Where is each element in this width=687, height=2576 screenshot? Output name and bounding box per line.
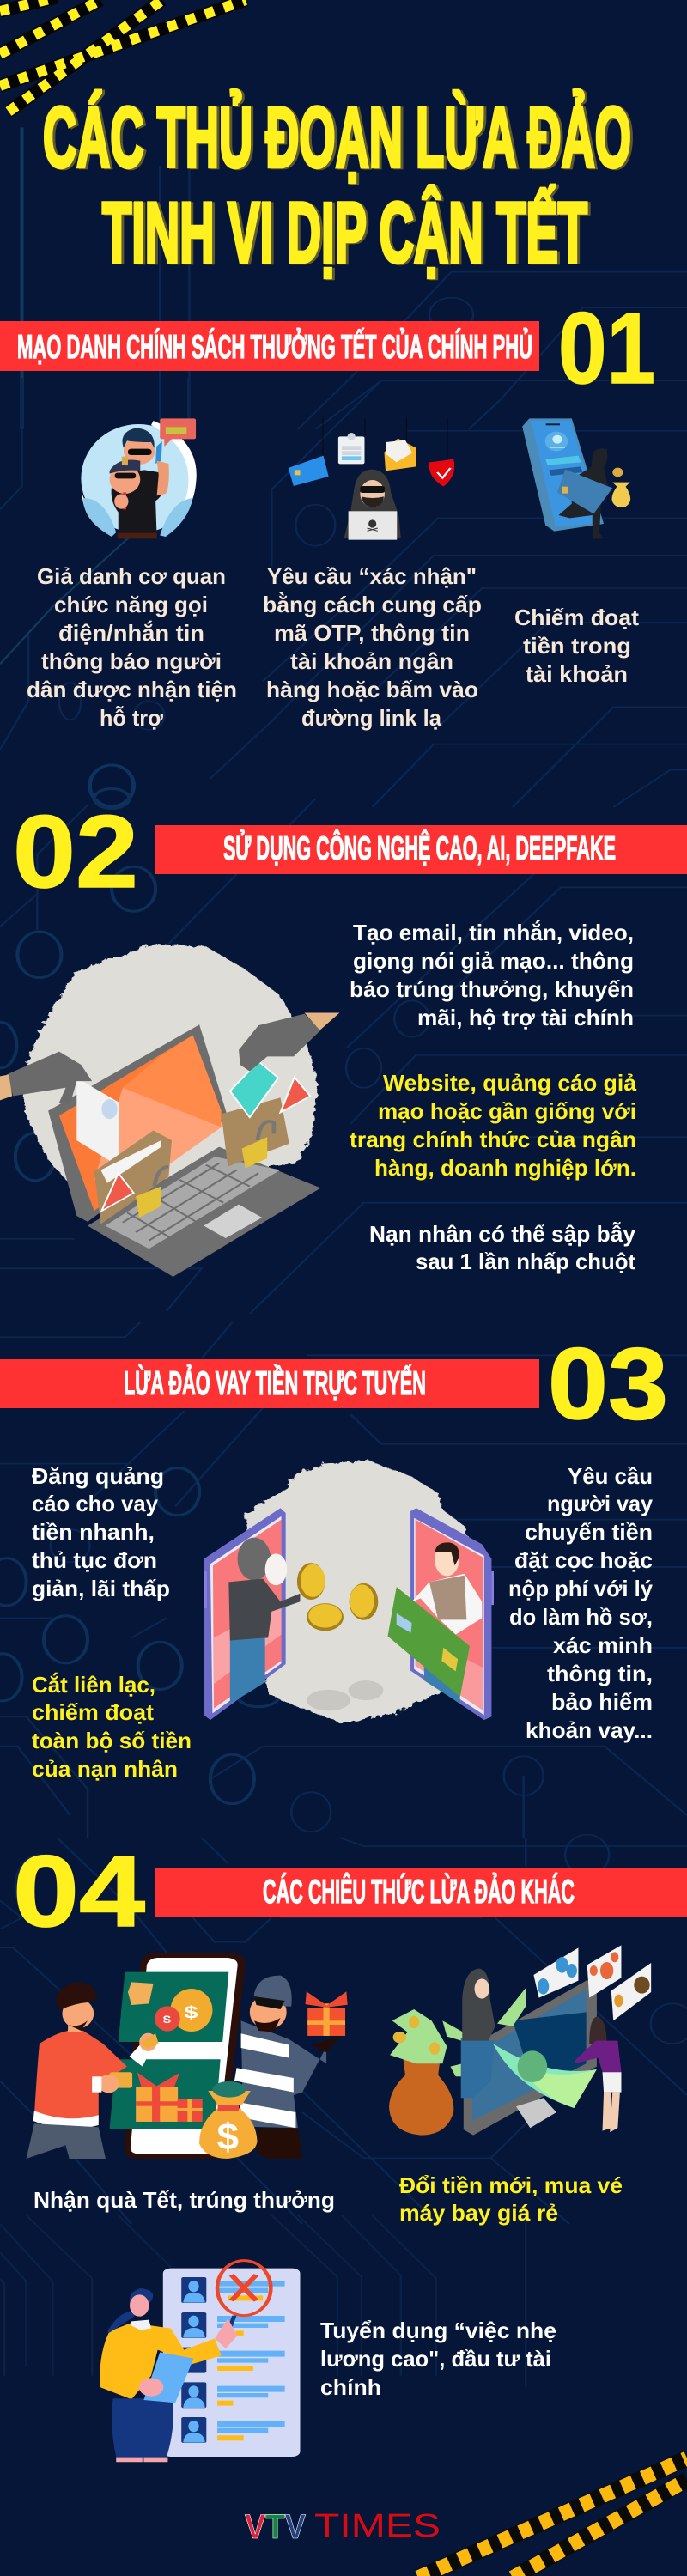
text: recruitment and investment: lương cao", đầu tư tài	[320, 2346, 551, 2372]
text: deposit request: người vay	[547, 1491, 654, 1516]
text: quick loan ads: giản, lãi thấp	[32, 1576, 170, 1601]
VTV Times logo: TIMES	[314, 2508, 441, 2544]
text: fake websites: trang chính thức của ngân	[350, 1127, 636, 1152]
text: cut contact	[32, 1672, 192, 1782]
text: quick loan ads: tiền nhanh,	[32, 1519, 155, 1545]
section 01 header bar	[0, 321, 539, 371]
icon: impostor officer with phone	[81, 418, 197, 538]
section 02 header bar	[155, 825, 687, 874]
VTV Times logo	[245, 2508, 441, 2546]
section 04 number: 04	[13, 1835, 145, 1948]
section 04	[13, 1835, 687, 2462]
text: impersonating officials: Giả danh cơ quan	[37, 563, 226, 589]
text: deposit request: đặt cọc hoặc	[514, 1547, 653, 1573]
text: appropriate money	[514, 605, 639, 687]
text: fake email and messages	[350, 920, 634, 1030]
text: recruitment and investment: Tuyển dụng “việc nhẹ	[320, 2318, 556, 2343]
text: impersonating officials: chức năng gọi	[54, 592, 208, 617]
text: fake websites: mạo hoặc gần giống với	[378, 1098, 636, 1124]
text: request for confirmation: hàng hoặc bấm vào	[266, 677, 478, 702]
illustration: money exchange and cheap air tickets	[389, 1945, 651, 2136]
text: deposit request: bảo hiểm	[551, 1689, 653, 1715]
caution tape: bottom right	[418, 2458, 687, 2576]
text: deposit request: xác minh	[553, 1632, 653, 1658]
text: request for confirmation: tài khoản ngân	[290, 648, 453, 674]
text: money exchange: Đổi tiền mới, mua vé	[399, 2172, 623, 2198]
illustration: hacked laptop on torn paper	[0, 945, 339, 1277]
text: fake websites: Website, quảng cáo giả	[383, 1070, 637, 1096]
section 03	[0, 1327, 668, 1782]
text: request for confirmation: mã OTP, thông tin	[274, 620, 470, 646]
text: appropriate money: tài khoản	[526, 661, 628, 687]
section 02 number: 02	[13, 794, 138, 909]
text: cut contact: Cắt liên lạc,	[32, 1672, 155, 1698]
section 03 heading: LỪA ĐẢO VAY TIỀN TRỰC TUYẾN	[124, 1364, 426, 1402]
text: request for confirmation: bằng cách cung cấp	[263, 592, 482, 617]
text: request for confirmation: Yêu cầu “xác nhận"	[267, 563, 477, 589]
text: one click trap	[369, 1221, 636, 1274]
text: quick loan ads: Đăng quảng	[32, 1463, 164, 1489]
section 03 header bar	[0, 1359, 539, 1408]
illustration: fake Tet gifts and prizes: $	[163, 2014, 171, 2026]
text: cut contact: chiếm đoạt	[32, 1699, 154, 1725]
text: one click trap: Nạn nhân có thể sập bẫy	[369, 1221, 636, 1247]
text: request for confirmation	[263, 563, 482, 731]
section 02	[0, 794, 687, 1277]
text: fake email and messages: giọng nói giả mạo... thông	[353, 948, 634, 974]
caution tape: top left	[0, 0, 246, 112]
text: impersonating officials: hỗ trợ	[100, 705, 163, 731]
text: recruitment and investment	[320, 2318, 556, 2400]
text: quick loan ads: thủ tục đơn	[32, 1547, 157, 1573]
text: money exchange	[399, 2172, 623, 2226]
text: deposit request: nộp phí với lý	[508, 1576, 654, 1601]
text: deposit request: do làm hồ sơ,	[509, 1604, 653, 1630]
section 01 number: 01	[558, 292, 655, 405]
section 03 number: 03	[548, 1327, 668, 1441]
text: impersonating officials: điện/nhắn tin	[58, 620, 204, 646]
text: one click trap: sau 1 lần nhấp chuột	[416, 1249, 635, 1274]
text: deposit request: Yêu cầu	[568, 1463, 653, 1489]
illustration: online loan scam between two phones	[204, 1461, 494, 1723]
text: impersonating officials: dân được nhận tiện	[27, 677, 237, 702]
text: deposit request	[508, 1463, 654, 1743]
text: fake email and messages: báo trúng thưởng, khuyến	[350, 976, 634, 1002]
text: money exchange: máy bay giá rẻ	[399, 2200, 558, 2226]
text: quick loan ads: cáo cho vay	[32, 1491, 159, 1516]
section 01	[0, 292, 655, 731]
text: deposit request: khoản vay...	[526, 1717, 653, 1743]
text: fake websites: hàng, doanh nghiệp lớn.	[374, 1155, 636, 1181]
illustration: fake job recruitment board	[100, 2261, 300, 2462]
text: fake email and messages: mãi, hộ trợ tài chính	[417, 1005, 634, 1030]
text: recruitment and investment: chính	[320, 2374, 381, 2400]
text: request for confirmation: đường link lạ	[301, 705, 442, 731]
text: appropriate money: tiền trong	[523, 633, 631, 659]
text: deposit request: thông tin,	[547, 1661, 653, 1686]
VTV Times logo: VTV	[245, 2508, 306, 2546]
icon: hacker stealing OTP and card data	[289, 418, 454, 540]
text: fake email and messages: Tạo email, tin nhắn, video,	[353, 920, 634, 945]
text: cut contact: của nạn nhân	[32, 1756, 178, 1782]
text: impersonating officials	[27, 563, 237, 731]
illustration: fake Tet gifts and prizes: $	[184, 2004, 198, 2022]
text: deposit request: chuyển tiền	[525, 1519, 653, 1545]
title	[43, 89, 631, 280]
text: appropriate money: Chiếm đoạt	[514, 605, 639, 630]
text: fake websites	[350, 1070, 637, 1181]
text: Tet gifts: Nhận quà Tết, trúng thưởng	[33, 2187, 335, 2213]
illustration: fake Tet gifts and prizes: $	[217, 2116, 239, 2158]
text: impersonating officials: thông báo người	[41, 648, 222, 674]
section 04 header bar	[155, 1868, 687, 1917]
icon: thief stealing from smartphone	[522, 418, 630, 538]
illustration: fake Tet gifts and prizes	[27, 1953, 346, 2159]
text: quick loan ads	[32, 1463, 170, 1601]
text: cut contact: toàn bộ số tiền	[32, 1728, 192, 1753]
